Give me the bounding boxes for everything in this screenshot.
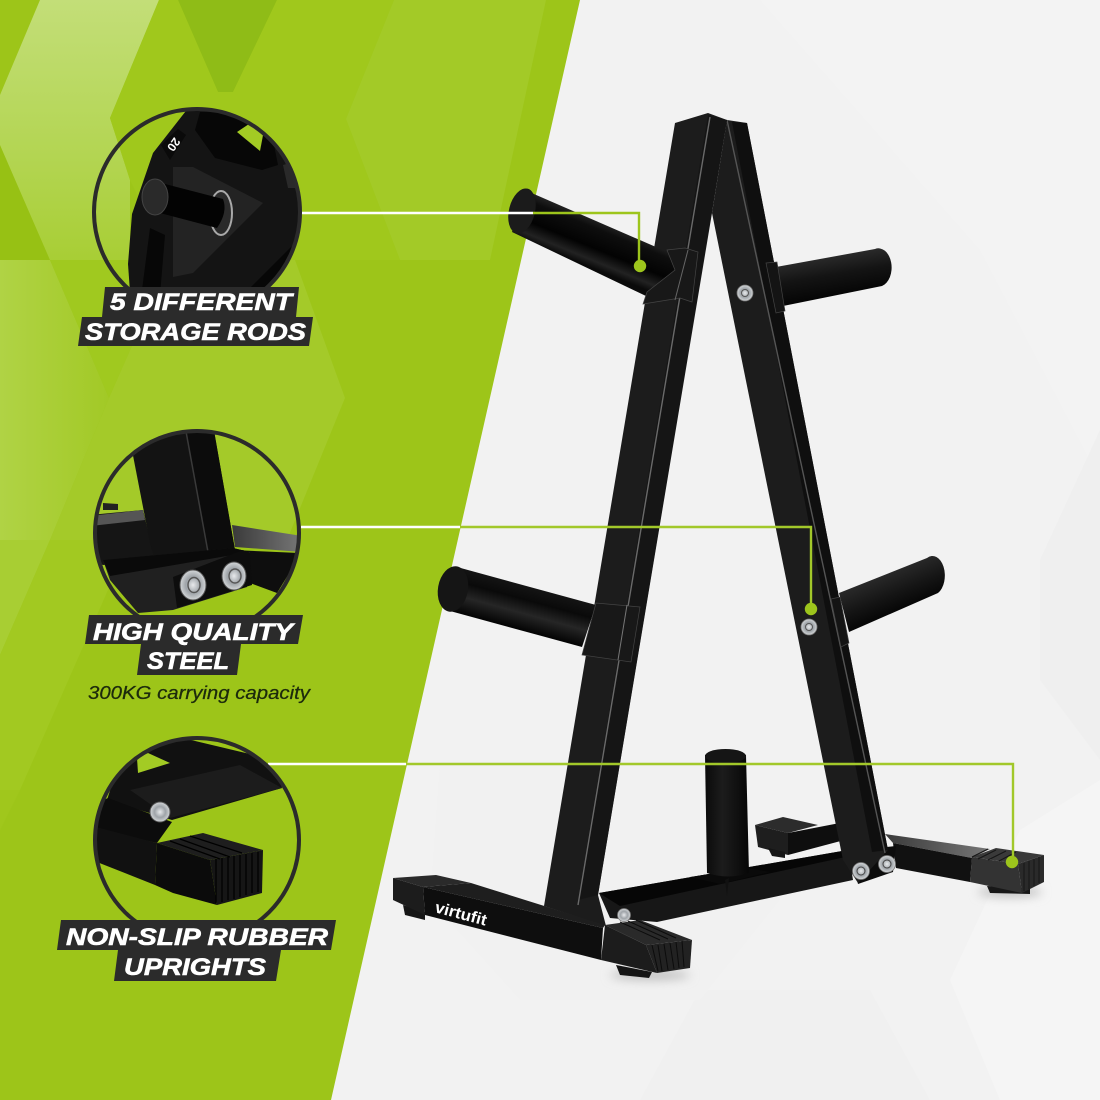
label: 5 different storage rods — [78, 287, 313, 346]
callout line: storage rods — [301, 213, 646, 272]
product: left upright — [544, 113, 727, 926]
product: left foot with rubber caps and logo — [393, 875, 692, 980]
detail circle: steel frame — [93, 429, 301, 615]
product: main cross bar — [599, 846, 896, 922]
label: 5 different storage rods: STORAGE RODS — [85, 319, 306, 346]
product: lower left rod — [434, 564, 640, 662]
bolt close-up — [150, 802, 170, 822]
product: rear foot — [755, 817, 852, 858]
label: non-slip rubber uprights: UPRIGHTS — [124, 954, 266, 981]
product: right foot with rubber cap — [885, 834, 1044, 897]
label: non-slip rubber uprights — [57, 920, 336, 981]
product: upper left rod — [504, 186, 698, 304]
detail circle: rubber upright — [93, 736, 301, 920]
text: carrying capacity: 300KG carrying capacity — [88, 683, 311, 703]
product: centre storage rod — [690, 749, 770, 896]
storage rod close-up — [142, 179, 232, 235]
detail circle: storage rod: 20 — [164, 135, 183, 154]
product: bolts — [618, 285, 896, 922]
product: upper right rod — [766, 248, 892, 313]
detail circle: storage rod: 20 — [291, 171, 303, 182]
background: green diagonal panel — [0, 0, 580, 1100]
label: high quality steel: STEEL — [147, 648, 229, 675]
bolts close-up — [180, 562, 246, 600]
label: high quality steel: HIGH QUALITY — [93, 619, 295, 646]
callout line: rubber uprights — [268, 764, 1018, 868]
label: high quality steel — [85, 615, 303, 675]
logo: virtufit — [433, 899, 489, 930]
weight plate — [128, 111, 298, 287]
label: 5 different storage rods: 5 DIFFERENT — [110, 289, 295, 316]
detail circle: storage rod — [92, 107, 302, 287]
product: right upright — [712, 120, 888, 883]
label: non-slip rubber uprights: NON-SLIP RUBBER — [66, 924, 329, 951]
product: lower right rod — [831, 556, 945, 647]
callout line: steel — [301, 527, 817, 615]
